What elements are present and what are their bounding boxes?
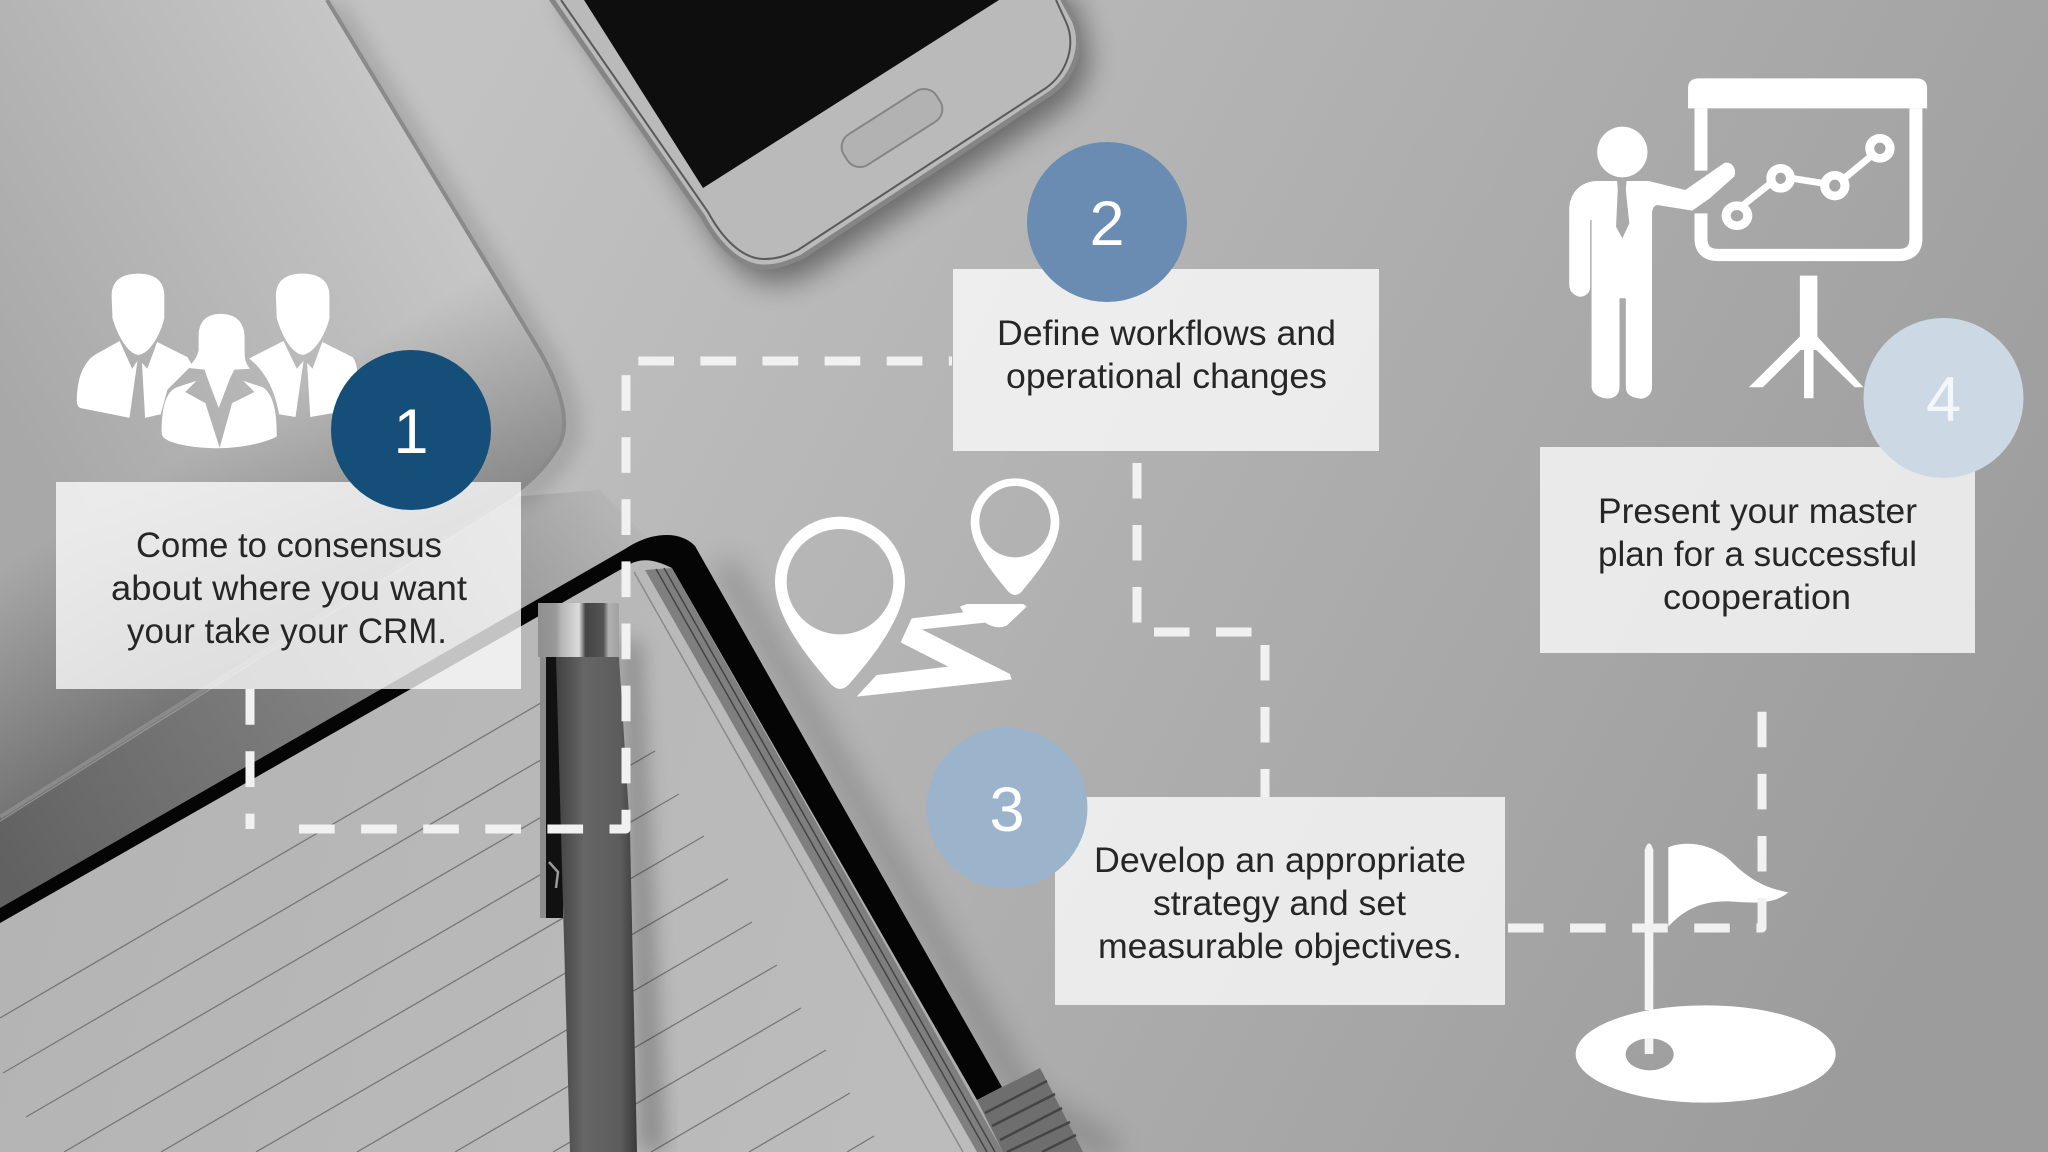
badge: number 3: 3: [989, 775, 1025, 845]
text: step 3: Develop an appropriate: [1094, 841, 1466, 880]
text: step 1: your take your CRM.: [127, 612, 447, 651]
text: step 3: [1094, 841, 1466, 966]
badge: number 4: 4: [1926, 365, 1961, 435]
text: step 4: Present your master: [1598, 492, 1917, 531]
text: step 1: Come to consensus: [136, 526, 442, 565]
connector: step 2 to step 3: [1137, 463, 1265, 797]
panel: step 4: [1540, 318, 2024, 653]
icon: map pins with route: [775, 478, 1059, 697]
text: step 1: [111, 526, 467, 651]
text: step 2: operational changes: [1006, 357, 1327, 396]
badge: number 2: 2: [1089, 189, 1125, 259]
icon: golf flag on green: [1576, 843, 1836, 1103]
badge: number 3: [926, 728, 1088, 888]
phone: [552, 0, 1088, 283]
badge: number 4: [1864, 318, 2024, 478]
panel: step 2: [953, 142, 1379, 451]
laptop: [0, 0, 650, 930]
text: step 4: [1598, 492, 1917, 617]
text: step 3: strategy and set: [1153, 884, 1406, 923]
text: step 1: about where you want: [111, 569, 467, 608]
notebook: [0, 535, 1114, 1152]
icon: presenter with chart board: [1569, 78, 1927, 399]
pen: [538, 603, 665, 1152]
icon: three business people: [77, 274, 358, 448]
connector: step 1 to step 2: [250, 361, 952, 829]
text: step 4: plan for a successful: [1598, 535, 1917, 574]
badge: number 2: [1027, 142, 1187, 302]
text: step 3: measurable objectives.: [1098, 927, 1462, 966]
text: step 2: Define workflows and: [997, 314, 1336, 353]
panel: step 1: [56, 350, 521, 689]
badge: number 1: 1: [393, 397, 429, 467]
text: step 4: cooperation: [1663, 578, 1851, 617]
connector: step 3 to step 4: [1508, 711, 1762, 928]
badge: number 1: [331, 350, 491, 510]
panel: step 3: [926, 728, 1505, 1005]
text: step 2: [997, 314, 1336, 396]
